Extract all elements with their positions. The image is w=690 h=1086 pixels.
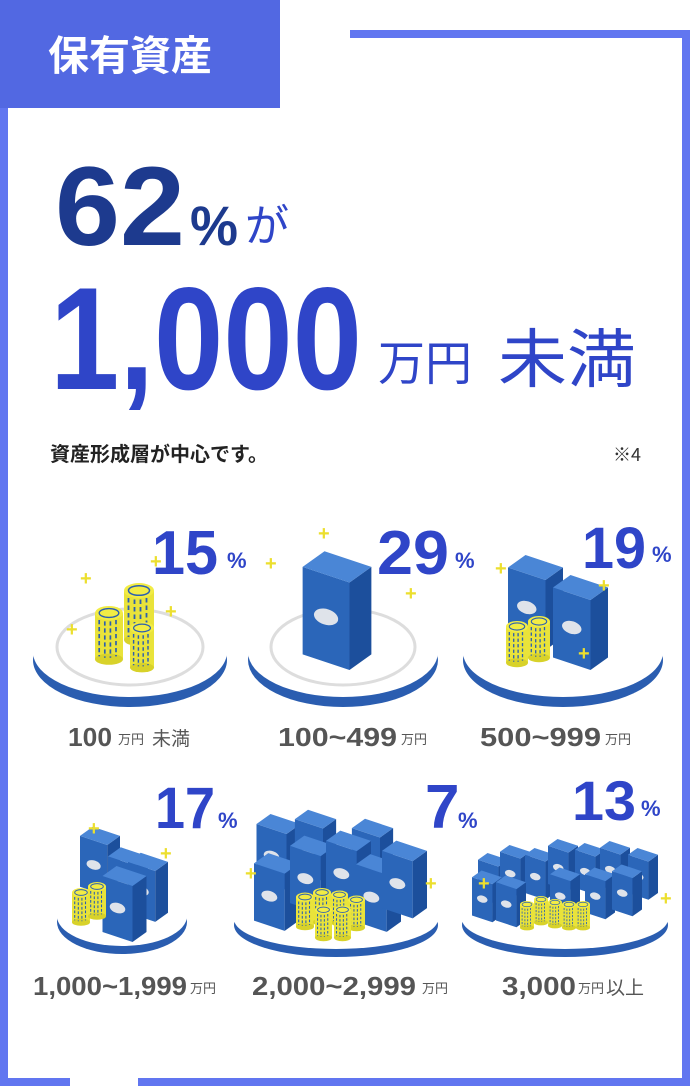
card: 100万円未満 xyxy=(33,519,247,752)
card: 500~999万円: 万円 xyxy=(605,732,631,747)
sparkles: + xyxy=(160,843,172,865)
tab heading: 保有資産 xyxy=(48,22,212,82)
card: 3,000万円以上: 万円 xyxy=(578,981,604,996)
card: 2,000~2,999万円 xyxy=(234,773,478,1001)
card: 100万円未満: 15 xyxy=(152,519,218,588)
card: 1,000~1,999万円: % xyxy=(218,808,238,833)
headline xyxy=(50,144,636,410)
card: 2,000~2,999万円: 2,000~2,999 xyxy=(252,971,416,1001)
card: 100万円未満: 未満 xyxy=(152,724,190,751)
headline: 62%が: が xyxy=(245,190,289,254)
sparkles: + xyxy=(425,873,437,895)
footnote: ※4 xyxy=(613,441,641,467)
sparkles xyxy=(66,523,672,910)
headline: 1,000万円未満: 未満 xyxy=(498,309,636,401)
sparkles: + xyxy=(478,873,490,895)
headline: 1,000万円未満: 万円 xyxy=(378,325,472,394)
sparkles: + xyxy=(318,523,330,545)
card: 3,000万円以上: 以上 xyxy=(606,973,644,1000)
card: 1,000~1,999万円 xyxy=(33,776,238,1001)
headline: 62%が xyxy=(55,144,289,269)
card: 100~499万円: 万円 xyxy=(401,732,427,747)
sparkles: + xyxy=(165,601,177,623)
card: 500~999万円: % xyxy=(652,542,672,567)
card: 100~499万円: 100~499 xyxy=(278,722,397,752)
card: 500~999万円: 500~999 xyxy=(480,722,601,752)
card: 100万円未満: 100 xyxy=(68,722,112,752)
sparkles: + xyxy=(265,553,277,575)
card: 3,000万円以上: 3,000 xyxy=(502,971,576,1001)
tab heading xyxy=(0,0,280,108)
headline: 1,000万円未満 xyxy=(50,257,636,420)
card: 100万円未満: % xyxy=(227,548,247,573)
headline: 62%が: % xyxy=(190,194,238,257)
sparkles: + xyxy=(495,558,507,580)
card: 1,000~1,999万円: 1,000~1,999 xyxy=(33,971,187,1001)
card: 100~499万円 xyxy=(248,519,475,752)
sparkles: + xyxy=(88,818,100,840)
sparkles: + xyxy=(66,619,78,641)
card: 500~999万円 xyxy=(463,516,672,752)
card: 2,000~2,999万円: % xyxy=(458,808,478,833)
card: 2,000~2,999万円: 7 xyxy=(425,773,459,842)
card: 3,000万円以上 xyxy=(462,769,668,1001)
sparkles: + xyxy=(405,583,417,605)
card: 500~999万円: 19 xyxy=(582,516,646,581)
card: 2,000~2,999万円: 万円 xyxy=(422,981,448,996)
sparkles: + xyxy=(80,568,92,590)
headline: 62%が: 62 xyxy=(55,144,185,269)
card: 3,000万円以上: % xyxy=(641,796,661,821)
sparkles: + xyxy=(578,643,590,665)
sparkles: + xyxy=(245,863,257,885)
card: 100~499万円: % xyxy=(455,548,475,573)
sparkles: + xyxy=(660,888,672,910)
card: 100~499万円: 29 xyxy=(377,519,449,588)
sparkles: + xyxy=(150,551,162,573)
card: 100万円未満: 万円 xyxy=(118,732,144,747)
card: 3,000万円以上: 13 xyxy=(572,769,636,832)
sparkles: + xyxy=(598,575,610,597)
card: 1,000~1,999万円: 17 xyxy=(155,776,215,841)
subtitle: 資産形成層が中心です。 xyxy=(50,438,268,467)
card: 1,000~1,999万円: 万円 xyxy=(190,981,216,996)
